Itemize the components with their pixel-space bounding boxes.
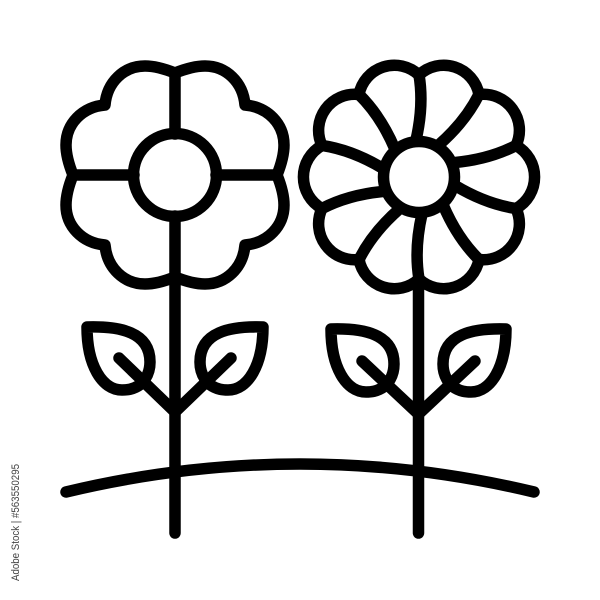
left flower [66,66,284,533]
left flower right leaf [200,327,263,390]
right flower [303,65,535,533]
right flower head outline [303,65,535,289]
left flower left leaf [87,327,150,390]
left flower petal dividers [73,73,277,175]
left flower centre [134,134,216,216]
right flower centre [384,142,454,212]
right flower stem [413,279,424,533]
right flower petal dividers [321,75,517,279]
right flower right leaf [443,329,506,392]
stock image credit: Adobe Stock | #563550295 [10,464,22,581]
right flower left leaf [331,329,394,392]
left flower head outline [66,66,284,284]
left flower leaf veins [119,358,231,412]
ground line [66,464,534,492]
left flower stem [169,216,181,533]
right flower leaf veins [362,361,475,414]
